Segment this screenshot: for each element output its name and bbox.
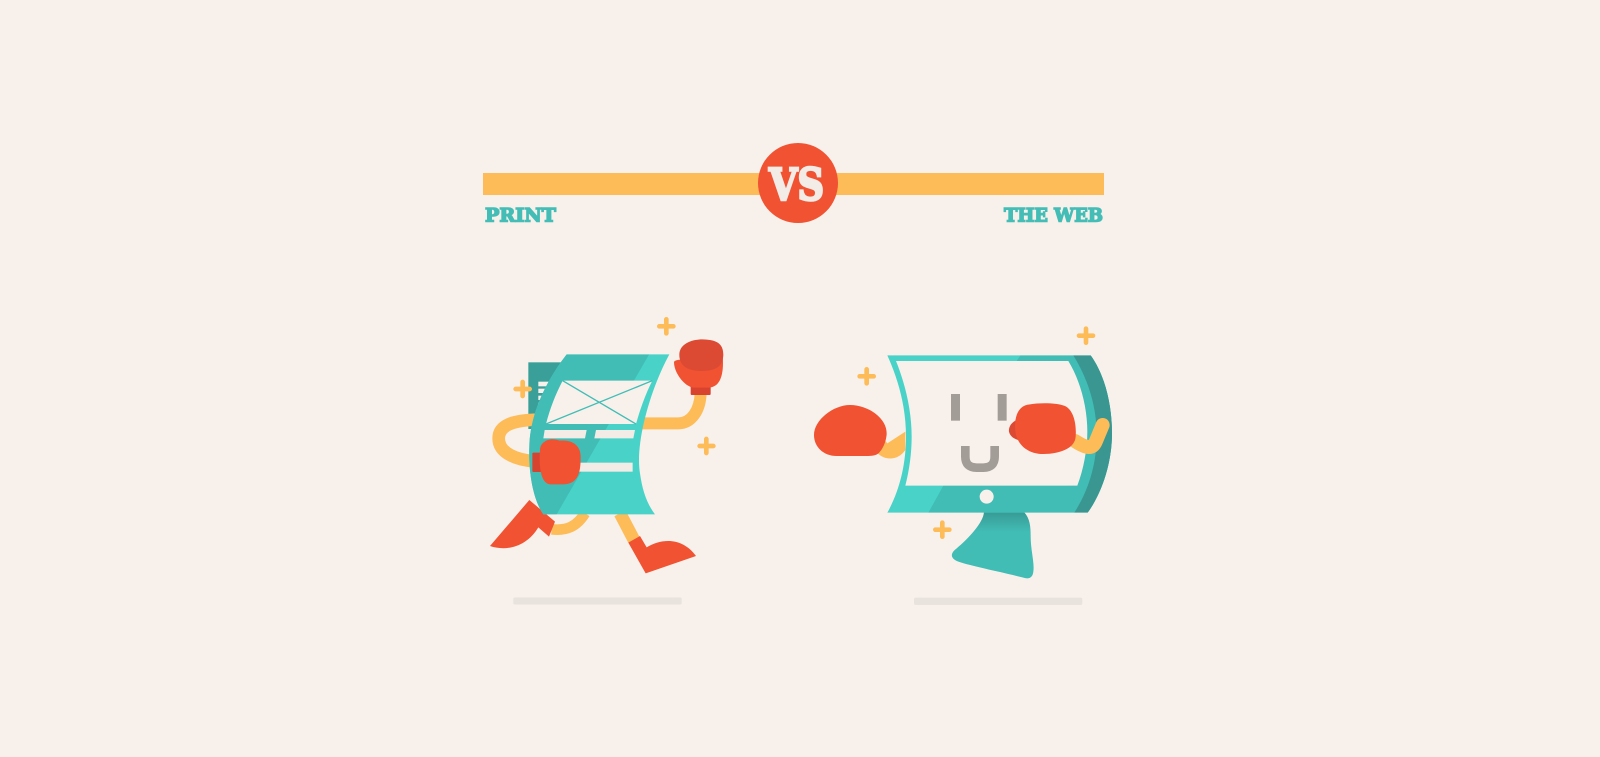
character: web monitor boxer xyxy=(814,329,1117,605)
image placeholder xyxy=(546,381,652,424)
label: print: PRINT xyxy=(485,204,556,226)
front glove xyxy=(532,439,581,484)
back page xyxy=(528,362,572,429)
character: print page boxer xyxy=(490,319,723,605)
right glove xyxy=(1009,403,1076,454)
screen xyxy=(896,361,1087,486)
back arm xyxy=(499,420,538,461)
left glove xyxy=(814,405,887,456)
ground shadow xyxy=(513,597,682,605)
header: versus bar xyxy=(483,143,1104,226)
label: the web: THE WEB xyxy=(1004,204,1103,226)
monitor frame xyxy=(887,353,1117,517)
sparkles xyxy=(860,329,1093,537)
sparkles xyxy=(516,319,713,453)
main page xyxy=(520,350,669,517)
right shoe xyxy=(628,536,696,573)
monitor stand xyxy=(952,512,1034,578)
front leg xyxy=(620,513,634,540)
face xyxy=(951,394,1007,468)
yellow bar xyxy=(483,173,1104,195)
back leg xyxy=(552,513,585,530)
left shoe xyxy=(490,500,555,548)
text rows xyxy=(543,430,635,472)
raised arm xyxy=(642,393,701,423)
VS badge: VS xyxy=(768,160,824,211)
VS badge xyxy=(758,143,838,223)
raised glove xyxy=(674,339,723,395)
right arm xyxy=(1075,425,1103,447)
ground shadow xyxy=(914,598,1082,605)
power button xyxy=(980,490,994,504)
left arm xyxy=(878,432,905,458)
